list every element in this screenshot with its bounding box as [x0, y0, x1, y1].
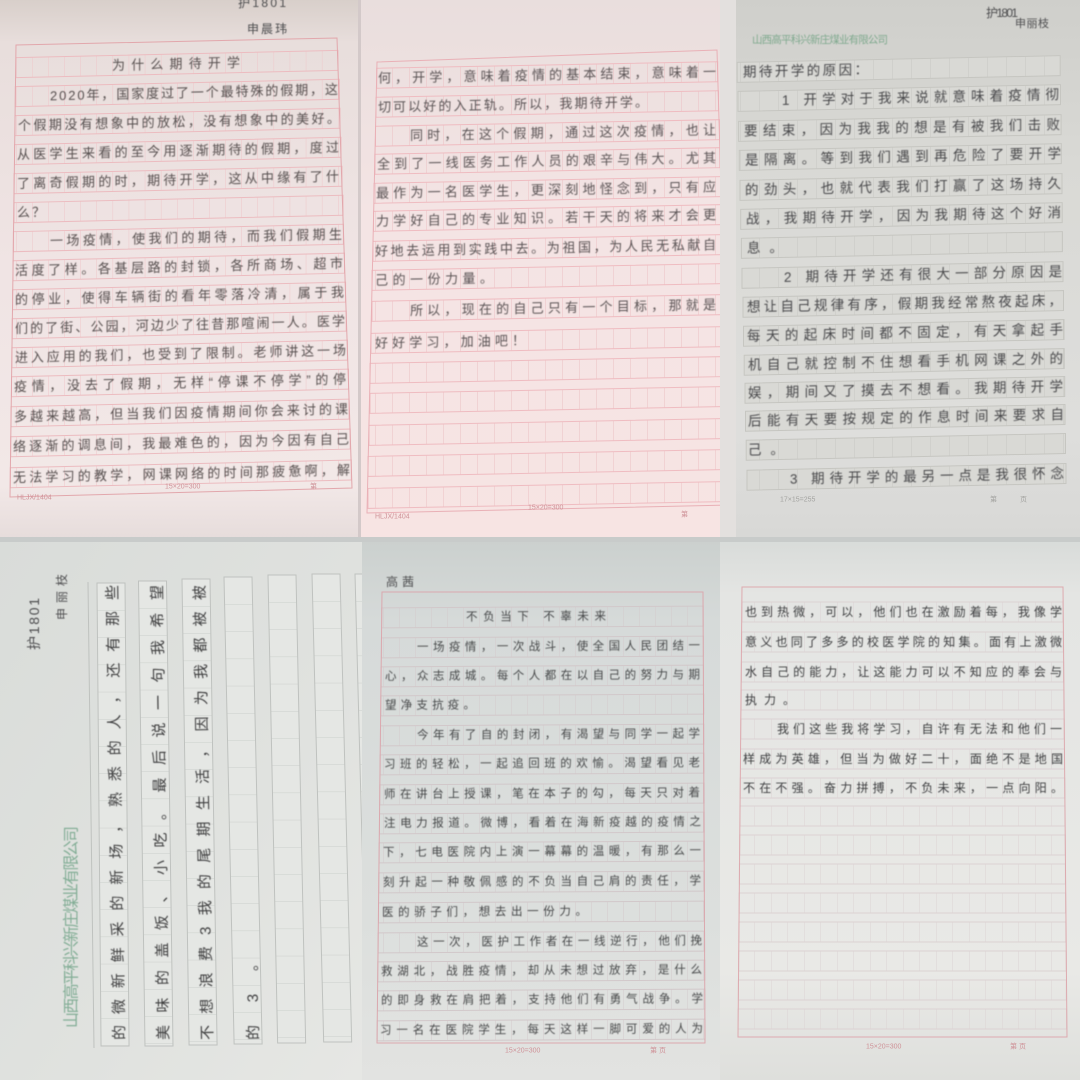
grid: grey column grid, page 4 [88, 574, 395, 1048]
footer: page 5 [505, 1046, 666, 1054]
handwriting: page 3 essay: 想让自己规律有序，假期我经常熬夜起床， [747, 293, 1062, 315]
company letterhead: page 3: 山西高平科兴新庄煤业有限公司 [752, 33, 888, 46]
grid: red writing grid, page 1 [10, 38, 352, 497]
handwriting: page 2 essay: 同时，在这个假期，通过这次疫情，也让 [410, 122, 716, 143]
footer: page 3: 17×15=255 [780, 496, 816, 504]
footer: page 2: 15×20=300 [528, 504, 564, 512]
panel: page 1, why I look forward to school [0, 0, 360, 540]
panel: page 4, sideways essay [0, 540, 395, 1080]
handwriting: page 1 essay: 了离奇假期的时，期待开学，这从中缘有了什 [17, 169, 339, 191]
handwriting: page 3 essay: 机自己就控制不住想看手机网课之外的 [748, 351, 1063, 373]
handwriting: page 1 essay: 从医学生来看的至今用逐渐期待的假期，度过 [17, 140, 339, 162]
handwriting: page 3 essay: 2 期待开学还有很大一部分原因是 [784, 264, 1062, 285]
handwriting: page 2 essay: 最作为一名医学生，更深刻地怪念到，只有应 [376, 179, 716, 201]
handwriting: page 5 essay: 师在讲台上授课，笔在本子的勾，每天只对着 [384, 785, 700, 801]
handwriting: page 3 essay: 战，我期待开学，因为我期待这个好消 [746, 204, 1061, 227]
handwriting: page 2 essay: 己的一份力量。 [375, 271, 493, 288]
signature: page 4: 申丽枝 [54, 574, 69, 620]
handwriting: page 5 essay: 刻升起一种敬佩感的不负当自己肩的责任，学 [383, 873, 701, 889]
footer: page 5: 第 页 [650, 1046, 666, 1054]
handwriting: page 5 essay: 今年有了自的封闭，有渴望与同学一起学 [417, 726, 700, 742]
handwriting: page 3 essay: 每天的起床时间都不固定，有天拿起手 [747, 321, 1063, 344]
handwriting: page 1 essay: 多越来越高，但当我们因疫情期间你会来讨的课 [14, 402, 348, 424]
handwriting: page 6 essay: 意义也同了多多的校医学院的知集。面有上激微 [745, 634, 1062, 649]
signature: page 1: 申晨玮 [247, 22, 287, 36]
handwriting: page 2 essay: 好好学习，加油吧！ [375, 333, 525, 351]
handwriting: page 1 essay: 络逐渐的调息间，我最难色的，因为今因有自己 [13, 432, 349, 454]
handwriting: page 5 essay: 下，七电医院内上演一幕幕的温暖，有那么一 [383, 843, 702, 859]
handwriting: page 1 essay: 活度了样。各基层路的封锁，各所商场、超市 [15, 256, 343, 278]
handwriting: page 5 essay: 救湖北，战胜疫情，却从未想过放弃，是什么 [381, 962, 702, 978]
panel: page 6, final page of essay [720, 540, 1080, 1080]
footer: page 2: 第 [681, 510, 688, 518]
grid: pink writing grid, page 6 [738, 587, 1067, 1037]
handwriting: page 5 essay: 一场疫情，一次战斗，使全国人民团结一 [417, 638, 700, 654]
handwriting: page 1 essay: 2020年，国家度过了一个最特殊的假期，这 [50, 82, 338, 103]
handwriting: page 2 essay: 力学好自己的专业知识。若干天的将来才会更 [376, 207, 716, 229]
handwriting: page 6 essay: 样成为英雄，但当为做好二十，面绝不是地国 [743, 751, 1063, 766]
handwriting: page 1 essay: 个假期没有想象中的放松，没有想象中的美好。 [18, 111, 340, 133]
handwriting: page 6 essay: 水自己的能力，让这能力可以不知应的奉会与 [745, 664, 1062, 679]
divider: seam between top and bottom photo rows [0, 537, 1080, 542]
signature: page 1 [238, 0, 287, 36]
handwriting: page 1 essay: 为什么期待开学 [112, 55, 240, 73]
handwriting: page 2 essay: 何，开学，意味着疫情的基本结束，意味着一 [378, 64, 716, 86]
signature: page 3: 申丽枝 [1015, 16, 1049, 30]
handwriting: page 4 essay: 的3。 [244, 956, 262, 1040]
handwriting: page 1 essay: 无法学习的教学，网课网络的时间那疲惫啊，解 [13, 463, 350, 485]
footer: page 1 [17, 482, 317, 502]
handwriting: page 5 essay: 心，众志成城。每个人都在以自己的努力与期 [385, 667, 700, 683]
handwriting: page 1 essay: 一场疫情，使我们的期待，而我们假期生 [50, 227, 342, 248]
handwriting: page 2 essay [375, 64, 716, 351]
handwriting: page 3 essay: 期待开学的原因： [743, 62, 868, 80]
handwriting: page 2 essay: 全到了一线医务工作人员的艰辛与伟大。尤其 [377, 150, 716, 172]
signature: page 3 [986, 6, 1049, 30]
handwriting: page 5 essay: 习一名在医院学生，每天这样一脚可爱的人为 [380, 1021, 703, 1037]
handwriting: page 4 essay: 的微新鲜采的新场，熟悉的人，还有那些 [104, 585, 128, 1040]
footer: page 6 [866, 1042, 1026, 1050]
handwriting: page 3 essay: 要结束，因为我我的想是有被我们击败 [744, 117, 1060, 139]
handwriting: page 3 essay: 是隔离。等到我们遇到再危险了要开学 [745, 145, 1061, 168]
signature: page 4: 护1801 [26, 598, 42, 650]
footer: page 2: HLJX/1404 [375, 514, 410, 520]
handwriting: page 5 essay: 注电力报道。微博，看着在海新疫越的疫情之 [384, 814, 702, 830]
handwriting: page 2 essay: 好地去运用到实践中去。为祖国，为人民无私献自 [375, 237, 716, 259]
footer: page 2 [375, 504, 688, 520]
footer: page 1: HLJX/1404 [17, 494, 52, 502]
handwriting: page 1 essay: 们的了街、公园，河边少了往昔那喧闹一人。医学 [15, 314, 345, 336]
handwriting: page 3 essay: 3 期待开学的最另一点是我很怀念 [790, 465, 1064, 487]
handwriting: page 3 essay [743, 58, 1064, 488]
grid: red writing grid, page 2 [367, 50, 730, 513]
grid: grey writing grid, page 3 [737, 56, 1066, 490]
handwriting: page 3 essay: 己。 [748, 442, 784, 458]
footer: page 1: 第 [310, 482, 317, 490]
footer: page 6: 第 页 [1010, 1042, 1026, 1050]
author name: page 5: 高茜 [386, 574, 414, 589]
signature: page 4 [26, 574, 69, 650]
panel: page 3, reasons for looking forward to school [720, 0, 1080, 540]
handwriting: page 6 essay [743, 604, 1063, 795]
company letterhead: page 4: 山西高平科兴新庄煤业有限公司 [62, 826, 80, 1028]
handwriting: page 5 essay: 医的骄子们，想去出一份力。 [382, 904, 587, 919]
handwriting: page 3 essay: 1 开学对于我来说就意味着疫情彻 [782, 86, 1059, 108]
handwriting: page 5 essay: 这一次，医护工作者在一线逆行，他们挽 [417, 933, 702, 949]
handwriting: page 6 essay: 执力。 [745, 693, 795, 707]
handwriting: page 1 essay: 么？ [17, 204, 45, 220]
handwriting: page 3 essay: 息。 [747, 239, 783, 256]
handwriting: page 4 essay: 不想浪费3我的尾期生活，因为我都被被 [192, 585, 216, 1040]
handwriting: page 5 essay [380, 608, 703, 1037]
handwriting: page 5 essay: 习班的轻松，一起追回班的欢愉。渴望看见老 [384, 755, 700, 771]
panel: page 2, continuation of the essay [358, 0, 730, 540]
handwriting: page 1 essay: 进入应用的我们，也受到了限制。老师讲这一场 [15, 343, 346, 365]
handwriting: page 2 essay: 切可以好的入正轨。所以，我期待开学。 [378, 95, 648, 115]
handwriting: page 6 essay: 不在不强。奋力拼搏，不负未来，一点向阳。 [743, 780, 1063, 795]
handwriting: page 1 essay: 的停业，使得车辆街的看年零落冷清，属于我 [15, 285, 344, 307]
panel: page 5, essay with red grid [362, 540, 720, 1080]
footer: page 3 [780, 494, 1027, 504]
handwriting: page 2 essay: 所以，现在的自己只有一个目标，那就是 [410, 297, 716, 318]
handwriting: page 3 essay: 的劲头，也就代表我们打赢了这场持久 [745, 175, 1062, 198]
handwriting: page 1 essay [13, 53, 350, 485]
handwriting: page 5 essay: 望净支抗疫。 [385, 697, 475, 712]
footer: page 6: 15×20=300 [866, 1044, 902, 1050]
handwriting: page 3 essay: 娱，期间又了摸去不想看。我期待开学 [748, 379, 1063, 401]
handwriting: page 6 essay: 也到热微，可以，他们也在激励着每，我像学 [745, 604, 1062, 619]
grid: pink writing grid, page 5 [377, 592, 705, 1043]
handwriting: page 4 essay: 美味的盖饭、小吃。最后说一句我希望 [149, 585, 172, 1040]
handwriting: page 3 essay: 后能有天要按规定的作息时间来要求自 [748, 406, 1064, 429]
footer: page 3: 页 [1020, 496, 1027, 504]
footer: page 1: 15×20=300 [165, 484, 201, 490]
footer: page 3: 第 [990, 494, 997, 504]
handwriting: page 6 essay: 我们这些我将学习，自许有无法和他们一 [777, 721, 1062, 736]
handwriting: page 1 essay: 疫情，没去了假期，无样“停课不停学”的停 [14, 372, 346, 394]
handwriting: page 5 essay: 不负当下 不辜未来 [466, 609, 607, 623]
signature: page 3: 护1801 [986, 6, 1018, 20]
handwriting: page 4 essay [104, 585, 262, 1040]
handwriting: page 5 essay: 的即身救在肩把着，支持他们有勇气战争。学 [381, 991, 703, 1007]
footer: page 5: 15×20=300 [505, 1048, 541, 1054]
